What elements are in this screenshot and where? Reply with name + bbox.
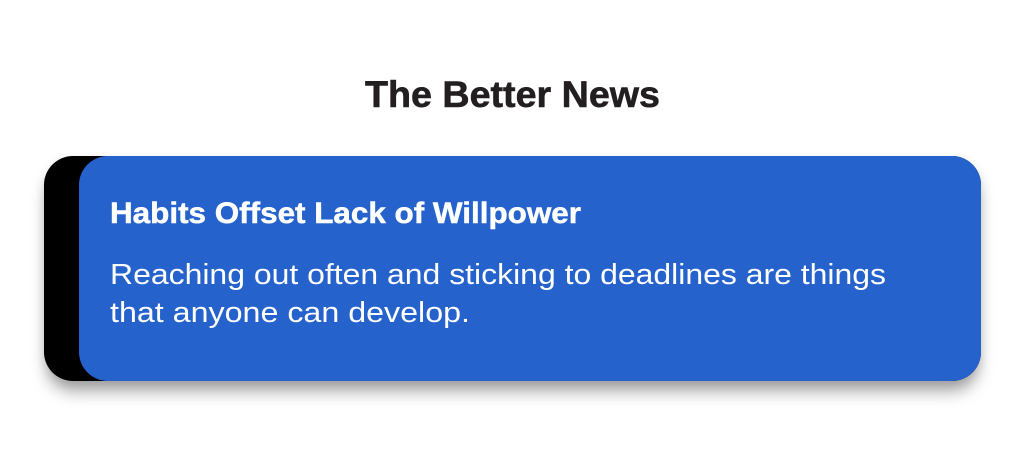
card heading: Habits Offset Lack of Willpower bbox=[110, 197, 581, 230]
panel: blue card face bbox=[79, 156, 981, 381]
panel: card bbox=[36, 156, 988, 401]
title: The Better News bbox=[365, 74, 660, 115]
panel: black backing with shadow bbox=[44, 156, 981, 381]
card body text: Reaching out often and sticking to deadlines are things bbox=[110, 259, 886, 291]
card body text: that anyone can develop. bbox=[110, 297, 470, 329]
card body text bbox=[110, 259, 886, 329]
